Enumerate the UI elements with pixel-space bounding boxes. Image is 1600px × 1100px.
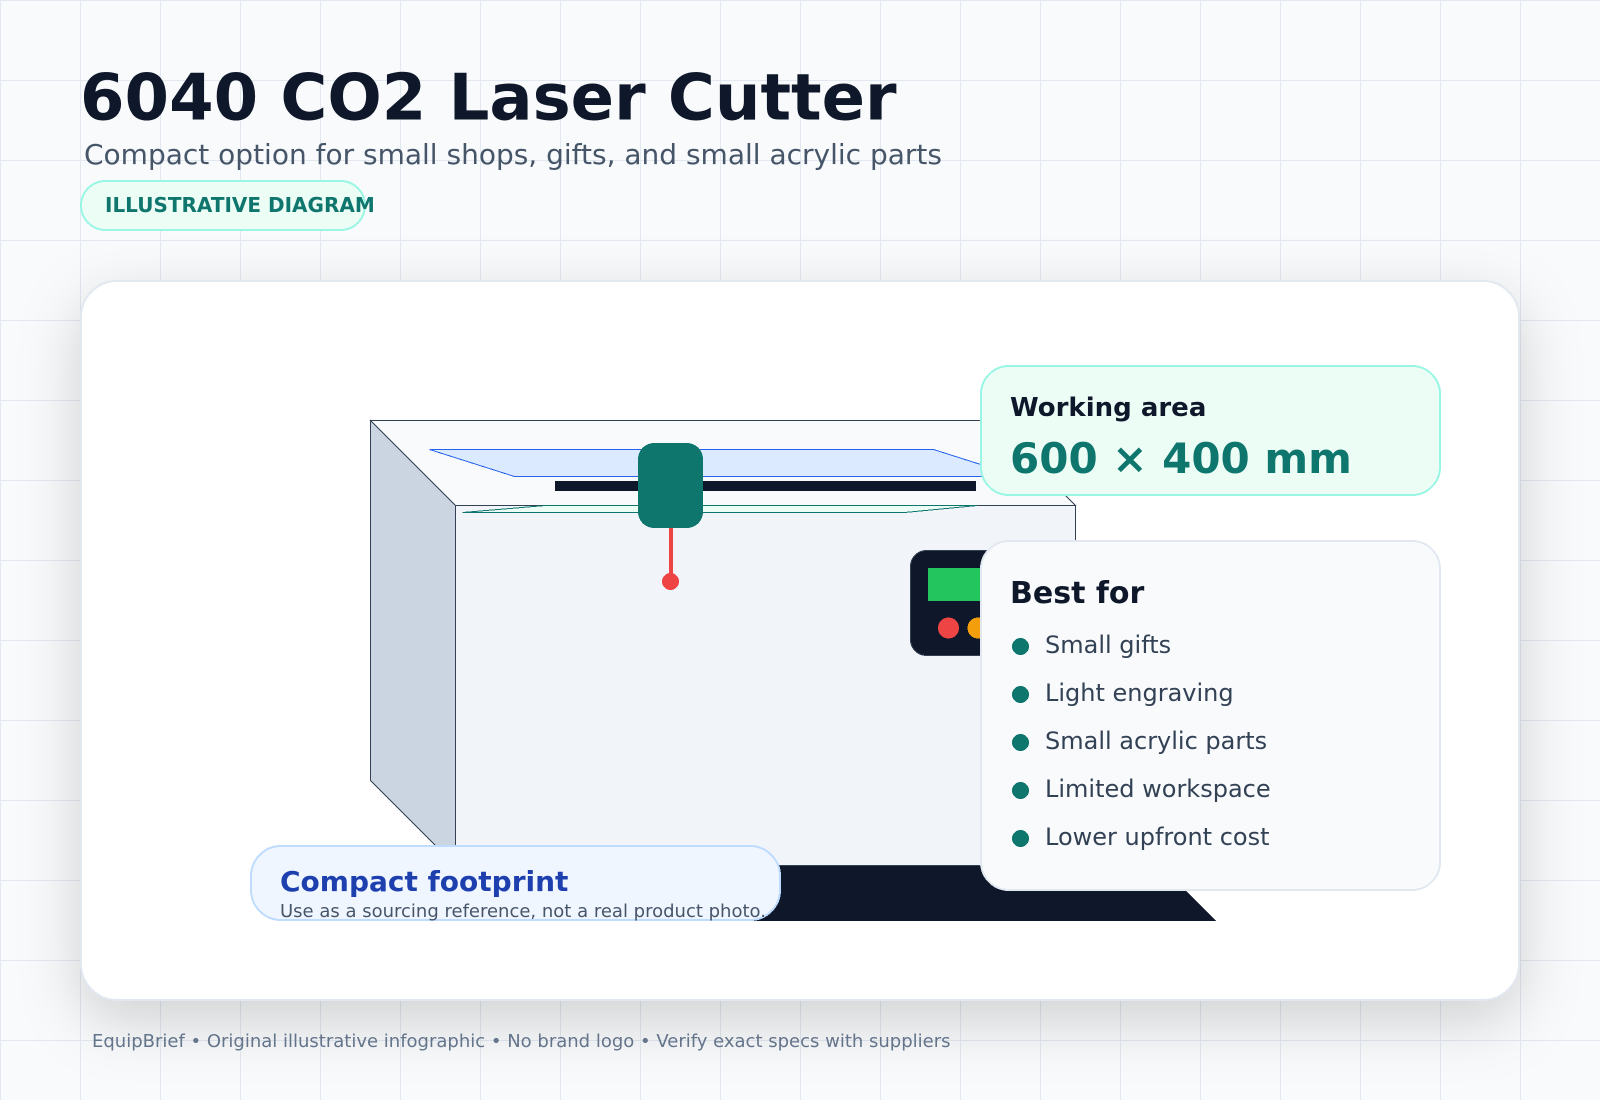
list item: small acrylic parts: Small acrylic parts	[1045, 727, 1267, 755]
callout: compact footprint: Compact footprint	[280, 865, 568, 898]
callout: compact footprint	[251, 846, 780, 922]
laser head	[638, 443, 703, 528]
machine base	[455, 866, 1216, 921]
title: 6040 CO2 Laser Cutter	[80, 62, 897, 136]
badge: illustrative diagram: ILLUSTRATIVE DIAGRAM	[105, 193, 375, 217]
laser spot	[662, 573, 679, 590]
machine front face	[456, 506, 1076, 866]
list item: small gifts: Small gifts	[1045, 631, 1171, 659]
panel: best for: Best for	[1010, 576, 1145, 611]
list item: limited workspace: Limited workspace	[1045, 775, 1271, 803]
callout: working area: Working area	[1010, 393, 1206, 423]
machine side face	[370, 420, 456, 866]
callout: working area: 600 × 400 mm	[1010, 434, 1352, 483]
panel: best for	[981, 541, 1440, 890]
glass lid	[430, 450, 1018, 476]
machine top face	[370, 420, 1076, 506]
callout: working area	[981, 366, 1440, 495]
control panel	[910, 550, 1040, 656]
list item: light engraving: Light engraving	[1045, 679, 1234, 707]
panel: main card	[81, 281, 1519, 1000]
badge: illustrative diagram	[81, 181, 375, 230]
gantry rail	[555, 481, 976, 491]
footer note: EquipBrief • Original illustrative infographic • No brand logo • Verify exact specs with suppliers	[92, 1031, 951, 1052]
subtitle: Compact option for small shops, gifts, and small acrylic parts	[84, 138, 942, 171]
list item: lower upfront cost: Lower upfront cost	[1045, 823, 1269, 851]
work bed	[462, 506, 978, 512]
callout: compact footprint: Use as a sourcing reference, not a real product photo.	[280, 901, 766, 922]
laser beam	[669, 526, 673, 580]
illustration: laser cutter machine	[370, 420, 1216, 921]
